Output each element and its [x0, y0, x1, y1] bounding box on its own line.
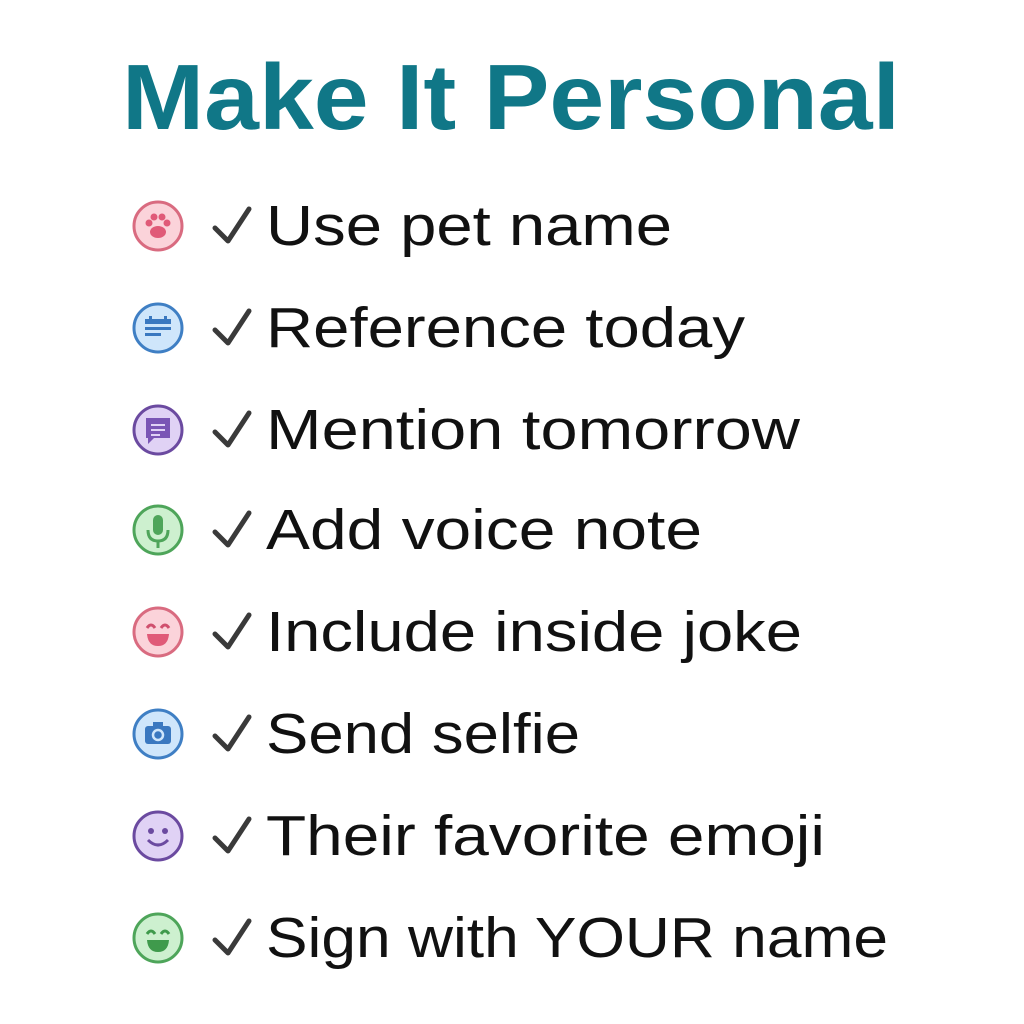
item: include inside joke [134, 600, 802, 664]
item text: Send selfie [266, 702, 580, 766]
check mark [215, 921, 249, 953]
check mark [215, 819, 249, 851]
icon: laughing face [134, 608, 182, 656]
item: send selfie [134, 702, 580, 766]
item: their favorite emoji [134, 804, 825, 868]
icon: paw [134, 202, 182, 250]
title: Make It Personal [122, 45, 900, 149]
check mark [215, 413, 249, 445]
check mark [215, 615, 249, 647]
check mark [215, 717, 249, 749]
item: add voice note [134, 498, 702, 562]
item text: Sign with YOUR name [266, 906, 888, 970]
item text: Include inside joke [266, 600, 802, 664]
item: reference today [134, 296, 746, 360]
icon: grin face [134, 914, 182, 962]
icon: smiley [134, 812, 182, 860]
icon: camera [134, 710, 182, 758]
item: sign with your name [134, 906, 888, 970]
item text: Mention tomorrow [266, 398, 801, 462]
item text: Reference today [266, 296, 746, 360]
check mark [215, 209, 249, 241]
icon: chat [134, 406, 182, 454]
item: mention tomorrow [134, 398, 801, 462]
item text: Add voice note [266, 498, 702, 562]
item text: Their favorite emoji [266, 804, 825, 868]
item: use pet name [134, 194, 672, 258]
icon: microphone [134, 506, 182, 554]
check mark [215, 513, 249, 545]
icon: calendar [134, 304, 182, 352]
check mark [215, 311, 249, 343]
item text: Use pet name [266, 194, 672, 258]
